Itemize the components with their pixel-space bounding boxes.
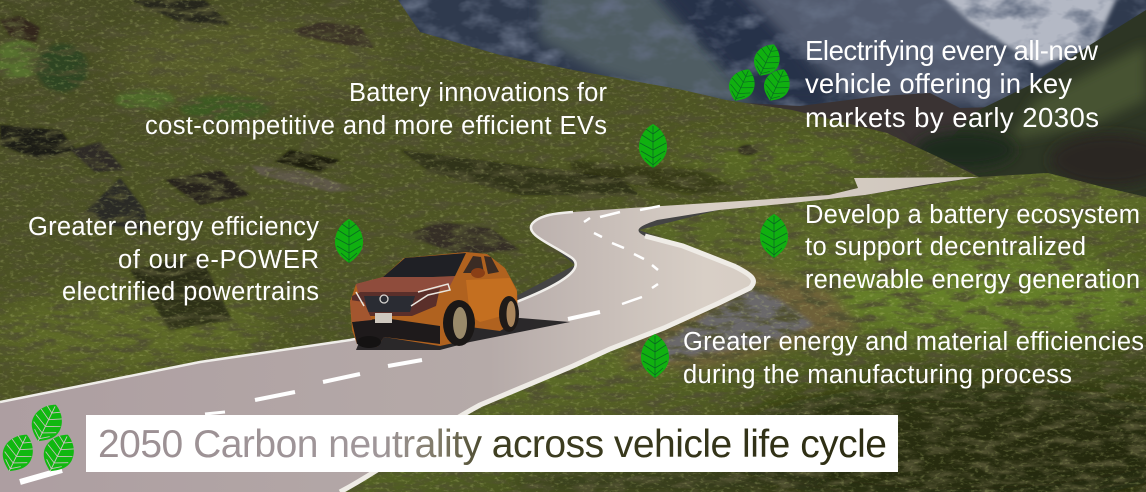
icon: leaf cluster top	[724, 39, 795, 106]
text: electrifying vehicles	[805, 35, 1099, 133]
text: e-POWER efficiency	[28, 213, 319, 306]
rocks on hillside	[0, 0, 758, 330]
road	[0, 177, 979, 492]
dark ridge	[726, 93, 1146, 240]
right dark hill	[940, 10, 1146, 197]
title text: 2050 Carbon neutrality across vehicle life cycle	[98, 423, 887, 466]
number plate	[375, 313, 392, 323]
road centre dashes	[20, 206, 660, 482]
icon: leaf manufacturing	[641, 334, 669, 378]
icon: leaf battery ecosystem	[760, 214, 788, 258]
text: battery ecosystem	[805, 201, 1140, 294]
title banner	[86, 415, 898, 472]
side windows	[463, 256, 484, 273]
right lower hillside	[340, 173, 1146, 492]
car: orange electric SUV	[350, 252, 570, 350]
text: battery ecosystem: renewable energy generation	[805, 266, 1140, 294]
badge	[380, 295, 388, 303]
lower bumper	[352, 318, 440, 347]
front panel	[352, 288, 440, 316]
car body	[350, 252, 518, 347]
icon: leaf cluster bottom	[0, 398, 81, 478]
mirror	[471, 268, 485, 278]
text: battery ecosystem: to support decentralized	[805, 233, 1086, 261]
rear wheel	[499, 296, 519, 332]
background: mountains	[398, 0, 1146, 197]
text: manufacturing efficiencies: Greater energy and material efficiencies	[683, 328, 1144, 356]
headlight strip	[411, 284, 450, 306]
front tyre	[357, 336, 381, 348]
text: manufacturing efficiencies	[683, 328, 1144, 389]
text: electrifying vehicles: vehicle offering in key	[805, 68, 1072, 99]
icon: leaf battery innovations	[639, 124, 667, 168]
text: battery innovations	[145, 79, 608, 140]
text: e-POWER efficiency: Greater energy efficiency	[28, 213, 319, 241]
car shadow	[356, 318, 570, 350]
text: battery innovations: Battery innovations for	[349, 79, 608, 107]
text: battery ecosystem: Develop a battery ecosystem	[805, 201, 1140, 229]
text: e-POWER efficiency: of our e-POWER	[118, 246, 319, 274]
text: battery innovations: cost-competitive and more efficient EVs	[145, 112, 607, 140]
text: electrifying vehicles: markets by early 2030s	[805, 102, 1099, 133]
icon: leaf e-POWER	[335, 219, 363, 263]
text: e-POWER efficiency: electrified powertrains	[62, 278, 319, 306]
side highlight	[466, 278, 517, 322]
left hillside	[0, 0, 979, 402]
text: manufacturing efficiencies: during the manufacturing process	[683, 361, 1072, 389]
windshield	[383, 253, 466, 277]
front wheel	[443, 300, 475, 346]
hood	[356, 276, 455, 292]
text: electrifying vehicles: Electrifying every all-new	[805, 35, 1098, 66]
shrubs on hillside	[0, 40, 270, 120]
